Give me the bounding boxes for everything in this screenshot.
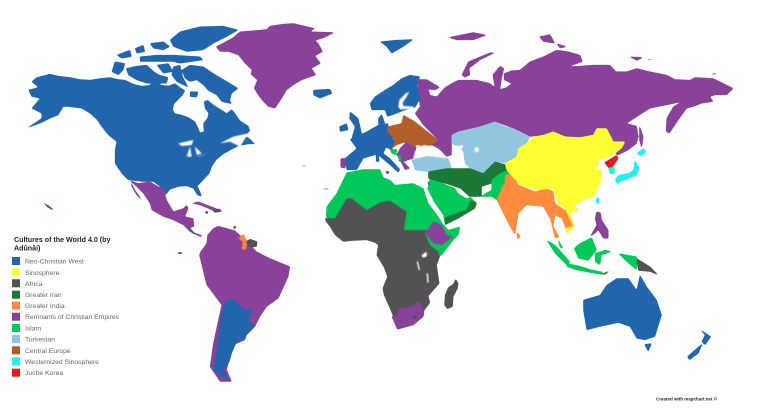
Israel <box>428 182 429 187</box>
Juche Korea <box>604 155 618 168</box>
Balkans <box>397 142 417 170</box>
region: South America <box>199 226 290 382</box>
small islands: Hawaii, Galapagos, Azores, Canaries <box>44 165 329 254</box>
Madagascar <box>444 279 458 309</box>
South Africa <box>392 301 424 329</box>
North Africa and Somalia, Islam <box>326 169 460 256</box>
Aral Sea <box>475 147 479 152</box>
Panama and Costa Rica <box>189 227 195 234</box>
Ethiopia <box>425 222 453 245</box>
Great Lakes <box>178 133 248 157</box>
region: North America, Neo-Christian West <box>27 26 332 197</box>
Australia <box>583 275 662 340</box>
region: Africa <box>325 169 477 329</box>
Sumatra <box>547 240 570 265</box>
legend item: Neo-Christian West <box>12 257 84 266</box>
Java and Lesser Sunda <box>567 263 603 275</box>
legend item: Westernized Sinosphere <box>12 357 99 366</box>
legend item: Central Europe: Central Europe <box>25 348 71 355</box>
Great Britain <box>349 112 362 138</box>
region: Europe, Neo-Christian West <box>339 75 452 187</box>
Central Europe <box>387 115 438 148</box>
legend item: Islam <box>12 324 42 332</box>
legend item: Greater India <box>12 302 65 310</box>
Malaya <box>557 238 563 248</box>
region: Korea and Japan <box>596 148 647 203</box>
region: Russia <box>380 32 733 157</box>
legend item: Juche Korea <box>12 369 63 377</box>
legend item: Sinosphere: Sinosphere <box>25 270 60 277</box>
legend <box>12 236 120 377</box>
legend item: Islam: Islam <box>25 326 42 332</box>
region: Oceania, Neo-Christian West <box>583 275 711 360</box>
region: Sinosphere <box>505 128 625 208</box>
Bosnia and Albania <box>390 149 401 162</box>
Caspian Sea <box>452 145 465 168</box>
Guyana <box>238 234 247 249</box>
New Zealand north <box>700 329 711 345</box>
Scandinavia <box>370 75 421 117</box>
Svalbard <box>380 39 413 53</box>
Tasmania <box>644 343 652 352</box>
Yemen and Oman <box>444 200 477 225</box>
legend item: Westernized Sinosphere: Westernized Sinosphere <box>25 359 99 366</box>
legend item: Greater India: Greater India <box>25 303 65 310</box>
legend item: Greater Iran: Greater Iran <box>25 292 62 299</box>
legend item: Sinosphere <box>12 268 60 277</box>
region: Central Asia, Turkestan <box>452 122 530 173</box>
legend item: Juche Korea: Juche Korea <box>25 370 63 377</box>
Ireland <box>339 123 348 132</box>
Black Sea <box>413 145 447 158</box>
Portugal <box>341 158 346 168</box>
legend item: Neo-Christian West: Neo-Christian West <box>25 258 84 266</box>
legend title: Adûnâi) <box>14 244 41 252</box>
legend item: Turkestan <box>12 335 55 344</box>
Western New Guinea <box>618 253 637 270</box>
region: Greenland, Remnants of Christian Empires <box>216 23 334 108</box>
legend item: Africa <box>12 279 43 288</box>
region: Greater Iran <box>428 162 508 197</box>
Timor <box>602 271 610 275</box>
South Korea <box>608 166 615 174</box>
Hokkaido <box>637 148 647 156</box>
Persian Gulf <box>454 187 470 198</box>
legend item: Remnants of Christian Empires: Remnants of Christian Empires <box>25 314 120 321</box>
Hainan <box>573 207 578 212</box>
Pakistan, Islam <box>480 170 515 200</box>
Philippines <box>590 212 608 238</box>
Taiwan <box>596 197 599 203</box>
New Zealand south <box>687 343 703 360</box>
legend item: Central Europe <box>12 346 71 355</box>
Japan <box>615 160 639 184</box>
Borneo <box>574 237 597 261</box>
African lakes <box>417 252 429 283</box>
Sulawesi <box>595 250 612 265</box>
Western Europe <box>345 123 400 173</box>
Greater India <box>497 173 573 238</box>
region: Mexico, Central America and Cuba <box>129 180 236 237</box>
Sri Lanka <box>517 232 521 239</box>
Arabian Peninsula <box>427 177 477 223</box>
Papua New Guinea <box>637 258 658 275</box>
Vietnam <box>562 205 575 233</box>
Turkey and Caucasus <box>412 156 452 172</box>
legend item: Turkestan: Turkestan <box>25 336 55 344</box>
legend item: Africa: Africa <box>25 281 43 288</box>
region: Asia <box>480 170 658 275</box>
Denmark <box>378 114 385 124</box>
credit: Created with mapchart.net © <box>656 396 718 402</box>
Mediterranean islands <box>376 155 390 174</box>
Argentina and Uruguay <box>213 300 255 381</box>
legend item: Greater Iran <box>12 291 62 299</box>
legend title: Cultures of the World 4.0 (by <box>14 236 110 244</box>
Gulf of Bothnia <box>398 92 414 109</box>
Suriname and French Guiana <box>246 239 257 247</box>
